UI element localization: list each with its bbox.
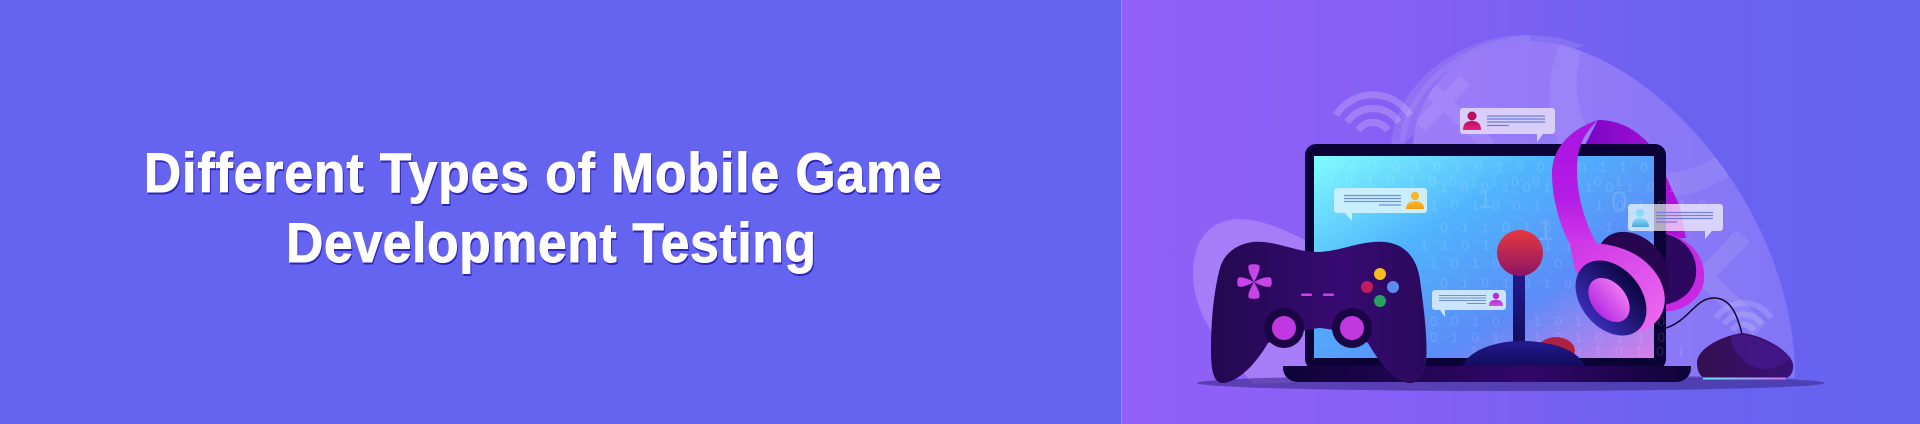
small left blob bbox=[1193, 219, 1320, 384]
left thumbstick bbox=[1264, 308, 1304, 348]
title: Different Types of Mobile Game bbox=[145, 144, 943, 206]
title: Development Testing bbox=[287, 214, 817, 276]
headphones front bbox=[1552, 120, 1685, 349]
joystick stick bbox=[1513, 270, 1525, 348]
colour buttons bbox=[1361, 268, 1399, 307]
laptop base bbox=[1283, 366, 1691, 382]
front band bbox=[1552, 120, 1600, 250]
dome inner ring bbox=[1550, 40, 1733, 199]
binary rain: 0 0 1 0 0 1 0 1 0 1 0 0 bbox=[1430, 313, 1665, 329]
X shape right bbox=[1705, 236, 1760, 330]
left ring stroke bbox=[1402, 38, 1530, 150]
binary rain bbox=[1325, 159, 1707, 359]
binary rain: 1 0 1 0 1 1 0 1 0 1 1 bbox=[1430, 255, 1645, 271]
mouse cable bbox=[1666, 298, 1742, 334]
ear disc bbox=[1580, 270, 1638, 330]
inner dome bbox=[1413, 41, 1795, 378]
centre buttons bbox=[1301, 294, 1334, 296]
dome decorations bbox=[1417, 40, 1760, 330]
front ear shell bbox=[1570, 243, 1665, 332]
joystick base bbox=[1462, 341, 1585, 366]
headphones far ear cup bbox=[1655, 232, 1704, 312]
binary rain: 0 1 1 0 1 0 0 1 1 0 1 bbox=[1440, 219, 1655, 235]
laptop frame bbox=[1305, 144, 1666, 370]
chat bubble: top bbox=[1460, 108, 1555, 142]
binary rain: 1 0 1 0 1 0 1 0 1 0 0 1 0 1 1 0 bbox=[1330, 159, 1648, 175]
X shape top bbox=[1417, 77, 1490, 146]
ground shadow bbox=[1197, 375, 1825, 391]
chat bubble: left on screen bbox=[1334, 188, 1427, 221]
headphones rear band bbox=[1585, 120, 1686, 238]
chat bubble: right translucent bbox=[1628, 204, 1723, 239]
binary rain: 1 0 bbox=[1537, 214, 1588, 247]
d-pad bbox=[1237, 264, 1272, 299]
ear pad ring bbox=[1561, 247, 1661, 349]
game controller bbox=[1211, 242, 1427, 383]
binary rain: 0 bbox=[1611, 186, 1628, 219]
chat bubble: lower on screen bbox=[1432, 290, 1506, 317]
right panel background bbox=[1122, 0, 1920, 424]
binary rain: 1 0 1 0 0 1 0 1 1 0 1 0 1 0 bbox=[1430, 197, 1707, 213]
binary rain: 0 1 0 1 0 1 0 1 0 1 1 0 bbox=[1430, 329, 1665, 345]
binary rain: 1 0 0 1 0 1 0 1 0 1 0 1 bbox=[1440, 179, 1675, 195]
binary rain: 0 0 1 0 1 0 0 1 1 0 0 1 0 0 1 bbox=[1325, 173, 1622, 189]
laptop bbox=[1283, 144, 1707, 382]
controller body bbox=[1211, 242, 1427, 383]
mouse bbox=[1697, 333, 1793, 380]
binary rain: 0 1 0 1 0 1 0 1 1 0 1 bbox=[1440, 275, 1655, 291]
joystick bbox=[1462, 230, 1585, 366]
title: Different Types of Mobile Game bbox=[144, 142, 942, 204]
right thumbstick bbox=[1332, 308, 1372, 348]
title: Development Testing bbox=[286, 212, 816, 274]
binary rain: 1 1 0 1 1 0 1 1 0 1 0 1 bbox=[1420, 237, 1655, 253]
joystick ball bbox=[1497, 230, 1543, 276]
background dome shapes bbox=[1193, 35, 1795, 384]
icon: wifi left bbox=[1336, 95, 1410, 130]
icon: wifi right bbox=[1716, 303, 1771, 330]
panel divider line bbox=[1121, 0, 1122, 424]
binary rain: 1 0 1 0 1 0 1 0 1 0 1 bbox=[1470, 343, 1685, 359]
joystick red button bbox=[1537, 337, 1575, 365]
laptop screen bbox=[1314, 156, 1654, 358]
binary rain: 1 bbox=[1478, 184, 1492, 214]
back of front cup bbox=[1581, 217, 1685, 323]
left panel background bbox=[0, 0, 1122, 424]
title bbox=[144, 142, 943, 276]
outer dome ring bbox=[1391, 35, 1585, 150]
